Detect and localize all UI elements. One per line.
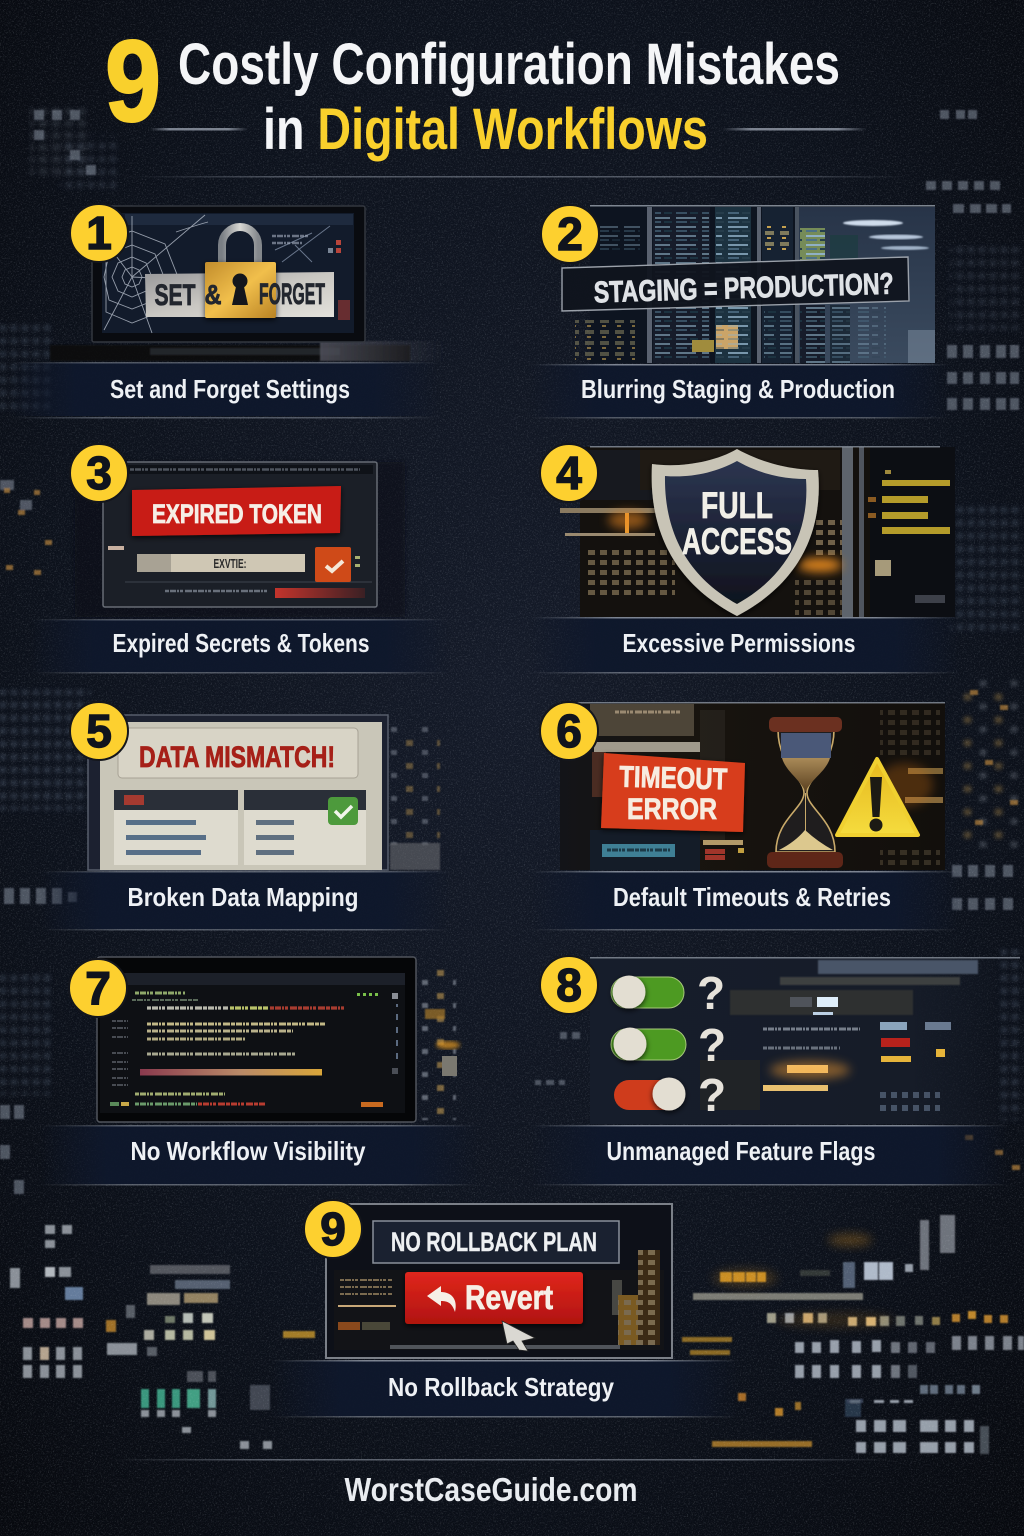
caption 6: Default Timeouts & Retries [613, 882, 891, 912]
caption 2 [530, 364, 950, 418]
number badge 3 [70, 444, 128, 502]
icon: mouse cursor [502, 1321, 535, 1351]
icon: padlock [205, 227, 276, 318]
panel 5: broken data mapping [40, 702, 450, 930]
question marks: ? [698, 1019, 726, 1071]
note word timeout: TIMEOUT [619, 761, 728, 796]
banner lettering: FORGET [259, 278, 325, 311]
icon: warning triangle [837, 759, 918, 835]
number badge 6 [540, 702, 598, 760]
banner: staging equals production: STAGING = PRODUCTION? [593, 268, 894, 309]
question marks: ? [697, 967, 725, 1019]
red note: timeout error [601, 753, 745, 832]
monitor with spider web [50, 206, 445, 361]
label: no rollback plan [373, 1221, 619, 1263]
monitor [75, 462, 405, 617]
right data table [244, 790, 366, 865]
icon: shield full access [652, 449, 819, 616]
caption 8: Unmanaged Feature Flags [606, 1136, 876, 1166]
icon: return arrow [427, 1286, 456, 1312]
number badge 9 [304, 1200, 362, 1258]
title numeral 9: 9 [105, 16, 161, 146]
banner lettering: & [204, 279, 222, 310]
heading: data mismatch [118, 728, 358, 778]
shield word full: FULL [701, 485, 773, 526]
panel 4: excessive permissions [530, 444, 960, 674]
title line 2: in Digital Workflows [263, 97, 708, 162]
number badge 8: 8 [556, 959, 582, 1011]
icon: green check [328, 797, 358, 825]
label: no rollback plan: NO ROLLBACK PLAN [391, 1227, 597, 1257]
caption 3: Expired Secrets & Tokens [112, 628, 370, 658]
caption 1: Set and Forget Settings [110, 374, 350, 404]
caption 2: Blurring Staging & Production [581, 374, 895, 404]
number badge 4: 4 [556, 447, 582, 499]
panel 6: timeout errors [530, 702, 960, 930]
red banner: expired token [132, 486, 341, 536]
banner lettering [154, 278, 325, 312]
number badge 1 [70, 204, 128, 262]
caption 9 [270, 1360, 740, 1418]
caption 4 [530, 617, 960, 674]
caption 5: Broken Data Mapping [128, 882, 358, 912]
banner lettering: SET [154, 279, 196, 312]
caption 5 [40, 871, 450, 930]
caption 9: No Rollback Strategy [388, 1372, 614, 1402]
caption 7 [40, 1125, 480, 1186]
panel 8: feature flags [530, 956, 1020, 1186]
number badge 3: 3 [86, 447, 112, 499]
note word error: ERROR [627, 793, 717, 826]
number badge 4 [540, 444, 598, 502]
input: expire field: EXVTIE: [214, 556, 246, 571]
number badge 1: 1 [86, 207, 112, 259]
panel 2: staging vs production [530, 205, 950, 418]
number badge 7: 7 [85, 962, 111, 1014]
shield word access: ACCESS [682, 521, 792, 562]
button: revert [405, 1272, 583, 1324]
desk backdrop [560, 702, 945, 870]
title line 1: Costly Configuration Mistakes [178, 32, 840, 97]
flag toggle 2 [611, 1028, 686, 1060]
panel 1: set and forget [10, 204, 445, 418]
caption 6 [530, 871, 960, 930]
icon: orange check button [315, 547, 351, 582]
number badge 5 [70, 702, 128, 760]
icon: hourglass [767, 717, 843, 868]
panel 3: expired tokens [30, 444, 450, 674]
panel 7: no workflow visibility [40, 957, 480, 1186]
set and forget banner [145, 272, 334, 317]
question marks: ? [698, 1069, 726, 1121]
server room backdrop [560, 446, 955, 617]
number badge 5: 5 [86, 705, 112, 757]
number badge 2 [541, 205, 599, 263]
monitor frame [88, 715, 440, 870]
title [105, 16, 910, 178]
button label: Revert [465, 1279, 553, 1317]
number badge 6: 6 [556, 705, 582, 757]
number badge 2: 2 [557, 208, 583, 260]
monitor with log lines [97, 957, 460, 1122]
left data table [114, 790, 238, 865]
number badge 8 [540, 956, 598, 1014]
monitor [326, 1204, 672, 1358]
bottom-right windows [682, 1215, 1024, 1454]
heading: data mismatch: DATA MISMATCH! [139, 741, 335, 774]
dashboard backdrop [535, 957, 1020, 1124]
question marks [697, 967, 726, 1121]
number badge 9: 9 [320, 1203, 346, 1255]
number badge 7 [69, 959, 127, 1017]
server racks [575, 205, 935, 363]
red banner: expired token: EXPIRED TOKEN [152, 499, 322, 529]
caption 3 [30, 619, 450, 674]
flag toggle 1 [611, 976, 684, 1008]
caption 7: No Workflow Visibility [130, 1136, 366, 1166]
flag toggle 3 [614, 1078, 686, 1110]
caption 8 [530, 1125, 1010, 1186]
caption 4: Excessive Permissions [622, 628, 856, 658]
input: expire field [137, 554, 305, 572]
caption 1 [10, 362, 440, 418]
banner: staging equals production [562, 257, 909, 311]
panel 9: no rollback strategy [270, 1200, 740, 1418]
bottom-left windows [10, 1225, 315, 1449]
footer: WorstCaseGuide.com [344, 1471, 638, 1508]
